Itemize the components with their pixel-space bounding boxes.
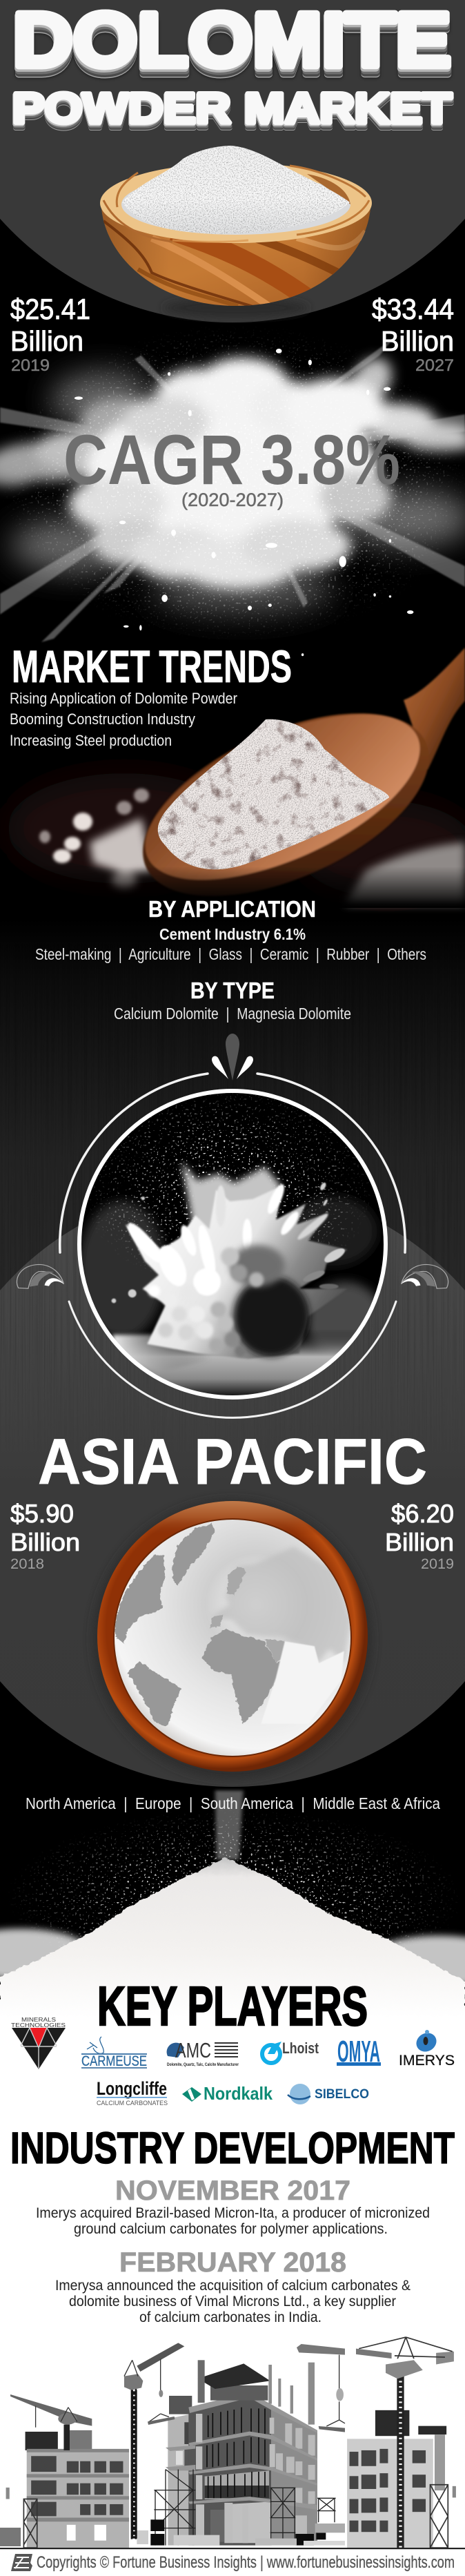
central building and crane: [124, 2343, 345, 2546]
year: 2027: [415, 356, 454, 375]
heading: by application: BY APPLICATION: [148, 896, 316, 922]
crane on right jib: [297, 2344, 345, 2432]
logo: Carmeuse: CARMEUSE: [81, 2053, 147, 2069]
description: [36, 2205, 430, 2237]
right crane: [356, 2337, 454, 2548]
ornament: right flourish: [402, 1264, 448, 1288]
unit: Billion: [10, 325, 83, 357]
list: types: Calcium Dolomite | Magnesia Dolomite: [114, 1005, 351, 1023]
logo: Longcliffe: [97, 2078, 168, 2107]
large background circle: [0, 1185, 465, 1787]
ground line: [0, 2548, 465, 2549]
left crane: [10, 2394, 92, 2450]
logo: Minerals Technologies: [11, 2017, 66, 2069]
icon: globe in wooden frame: [92, 1499, 373, 1779]
stat: 2027 value: [372, 293, 454, 375]
development: November 2017: [36, 2176, 430, 2237]
CAGR period: (2020-2027): [181, 490, 284, 510]
development: February 2018: [55, 2247, 410, 2325]
heading: Asia Pacific: ASIA PACIFIC: [38, 1425, 427, 1498]
panel: by type: [114, 978, 351, 1023]
trend 1: Rising Application of Dolomite Powder: [10, 690, 237, 707]
core and right face: [188, 2394, 317, 2546]
logo: Minerals Technologies: MINERALS: [21, 2017, 56, 2023]
icon: Fortune Business Insights logo: [11, 2554, 32, 2571]
date: FEBRUARY 2018: [119, 2247, 346, 2278]
poles: [268, 2363, 315, 2425]
value: $6.20: [391, 1500, 454, 1528]
year: 2019: [11, 356, 50, 375]
logo: AMC: [167, 2038, 239, 2067]
logos: key players: OMYA: [337, 2035, 380, 2069]
description: dolomite business of Vimal Microns Ltd., a key supplier: [69, 2294, 396, 2309]
CAGR callout: [63, 420, 400, 510]
dark interior of burst: [233, 1276, 309, 1357]
second crane mast: [131, 2389, 137, 2539]
value: $25.41: [10, 293, 90, 325]
footer: [11, 2553, 455, 2572]
illustration: construction site: [0, 2337, 465, 2549]
description: [55, 2278, 410, 2325]
value: $33.44: [372, 293, 454, 325]
title line: Powder Market: POWDER MARKET: [12, 85, 452, 133]
logo: Nordkalk: Nordkalk: [204, 2083, 273, 2104]
left building: [23, 2430, 129, 2548]
unit: Billion: [381, 325, 454, 357]
title: [12, 0, 452, 133]
logo: Lhoist: [262, 2040, 319, 2063]
top background circle: [0, 0, 465, 322]
description: of calcium carbonates in India.: [139, 2309, 321, 2325]
windows on right face: [276, 2423, 315, 2534]
description: ground calcium carbonates for polymer applications.: [74, 2221, 388, 2237]
logos: key players: [11, 2017, 455, 2107]
illustration: wooden spoon with powder: [0, 648, 465, 934]
logo: Sibelco: SIBELCO: [315, 2087, 369, 2102]
description: Imerys acquired Brazil-based Micron-Ita, a producer of micronized: [36, 2205, 430, 2221]
right building: [347, 2410, 448, 2548]
value: $5.90: [10, 1500, 74, 1528]
year: 2018: [10, 1556, 44, 1572]
logo: Lhoist: Lhoist: [282, 2040, 319, 2057]
illustration: powder pile: [0, 1790, 465, 2576]
logo: Omya: [337, 2035, 381, 2069]
scaffolding: [154, 2470, 336, 2546]
stat: 2019 regional value: [385, 1500, 454, 1572]
logo: AMC: AMC: [175, 2038, 211, 2062]
logo: Imerys: IMERYS: [399, 2053, 455, 2069]
highlight: cement industry: Cement Industry 6.1%: [159, 925, 306, 943]
heading: by type: BY TYPE: [190, 978, 275, 1003]
year: 2019: [421, 1556, 454, 1572]
trend 2: Booming Construction Industry: [10, 710, 195, 728]
logo: AMC: Dolomite, Quartz, Talc, Calcite Manufacturer: [167, 2062, 239, 2067]
heading: market trends: MARKET TRENDS: [12, 641, 292, 692]
panel: by application: [35, 896, 426, 963]
text: market trends list: [10, 690, 237, 749]
materials: [137, 2519, 345, 2546]
ornament: outer ring arcs: [60, 1074, 405, 1417]
columns: [196, 2414, 275, 2544]
wood texture background: [0, 918, 465, 1450]
floor slabs: [166, 2392, 317, 2510]
unit: Billion: [385, 1528, 454, 1556]
wood grain overlay: [3, 1228, 464, 1374]
ornament: top drops: [212, 1034, 253, 1081]
illustration: powder explosion cloud: [0, 325, 465, 656]
unit: Billion: [10, 1528, 80, 1556]
date: NOVEMBER 2017: [115, 2176, 350, 2206]
logo: Carmeuse: [81, 2037, 147, 2069]
left wing: [168, 2396, 195, 2546]
stat: 2019 value: [10, 293, 90, 375]
site details: [0, 2486, 456, 2546]
trend 3: Increasing Steel production: [10, 732, 172, 749]
logo: Minerals Technologies: TECHNOLOGIES: [11, 2022, 66, 2028]
icon: wooden bowl with powder: [100, 146, 372, 318]
illustration: powder burst in circle: [78, 1090, 387, 1398]
description: Imerysa announced the acquisition of calcium carbonates &: [55, 2278, 410, 2294]
crane on left: [124, 2343, 184, 2539]
logo: Imerys: [399, 2029, 455, 2069]
ornament: left flourish: [17, 1264, 63, 1288]
CAGR value: CAGR 3.8%: [63, 420, 400, 499]
logo: Sibelco: [288, 2084, 369, 2104]
logo: Longcliffe: CALCIUM CARBONATES: [97, 2100, 168, 2107]
roof: [198, 2360, 270, 2403]
stat: 2018 value: [10, 1500, 80, 1572]
logo: Longcliffe: Longcliffe: [97, 2078, 167, 2099]
